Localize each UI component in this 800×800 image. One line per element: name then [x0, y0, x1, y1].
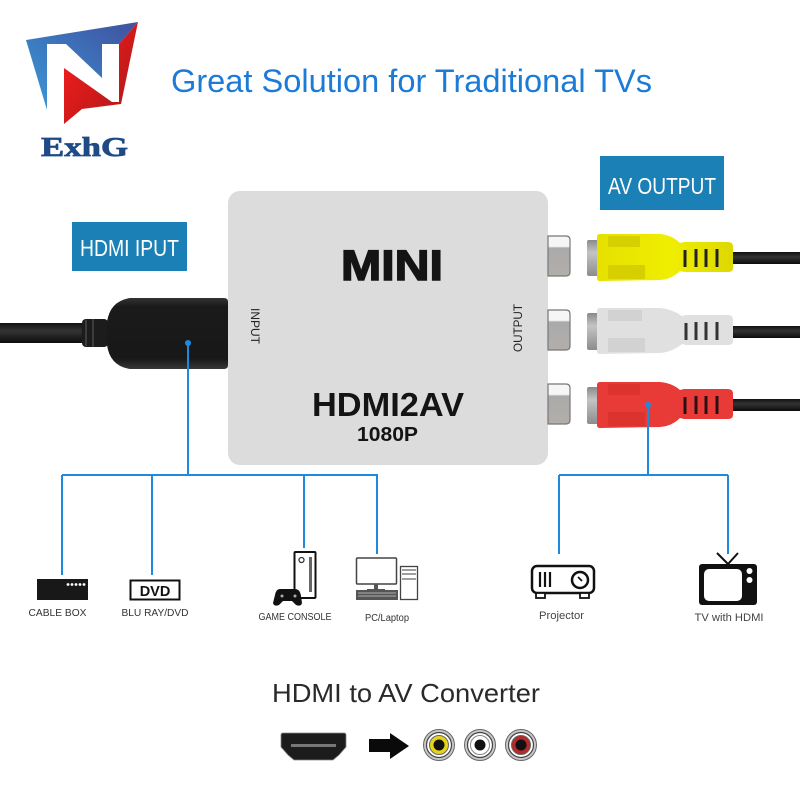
connector lines: input devices: [62, 340, 378, 575]
icon: TV: [699, 553, 757, 605]
MINI label: MINI: [341, 242, 443, 290]
converter box: [228, 191, 548, 465]
icon: projector: [532, 566, 594, 598]
yellow RCA plug: [587, 234, 800, 281]
caption: cable box: CABLE BOX: [28, 608, 87, 619]
caption: game console: GAME CONSOLE: [258, 612, 332, 623]
INPUT label: INPUT: [248, 308, 260, 344]
white RCA plug: [587, 308, 800, 354]
label: AV output: [600, 156, 724, 210]
label: AV output: AV OUTPUT: [608, 173, 716, 199]
logo: ExhG: [26, 22, 138, 162]
icon: yellow RCA jack: [424, 730, 454, 760]
caption: TV: TV with HDMI: [694, 612, 764, 624]
icon: DVD: [130, 580, 180, 600]
box RCA ports: [548, 236, 570, 424]
icon: game console: [273, 552, 316, 606]
connector lines: output devices: [559, 402, 728, 554]
red RCA plug: [587, 382, 800, 428]
icon: HDMI port: [281, 733, 346, 760]
1080P label: 1080P: [357, 424, 418, 446]
heading: HDMI to AV Converter: HDMI to AV Converter: [272, 678, 540, 708]
icon: arrow: [369, 733, 409, 759]
caption: PC: PC/Laptop: [365, 613, 409, 624]
caption: projector: Projector: [539, 610, 584, 622]
OUTPUT label: OUTPUT: [513, 304, 525, 352]
title: Great Solution for Traditional TVs: [171, 63, 652, 99]
icon: red RCA jack: [506, 730, 536, 760]
caption: blu ray: BLU RAY/DVD: [122, 608, 188, 619]
icon: PC: [356, 558, 418, 600]
HDMI plug and cable: [0, 298, 228, 369]
label: HDMI input: HDMI IPUT: [80, 235, 179, 261]
logo: ExhG: ExhG: [41, 132, 128, 162]
label: HDMI input: [72, 222, 187, 271]
icon: cable box: [37, 579, 88, 600]
icon: DVD: DVD: [140, 584, 170, 600]
icon: white RCA jack: [464, 730, 496, 760]
HDMI2AV label: HDMI2AV: [312, 386, 464, 423]
